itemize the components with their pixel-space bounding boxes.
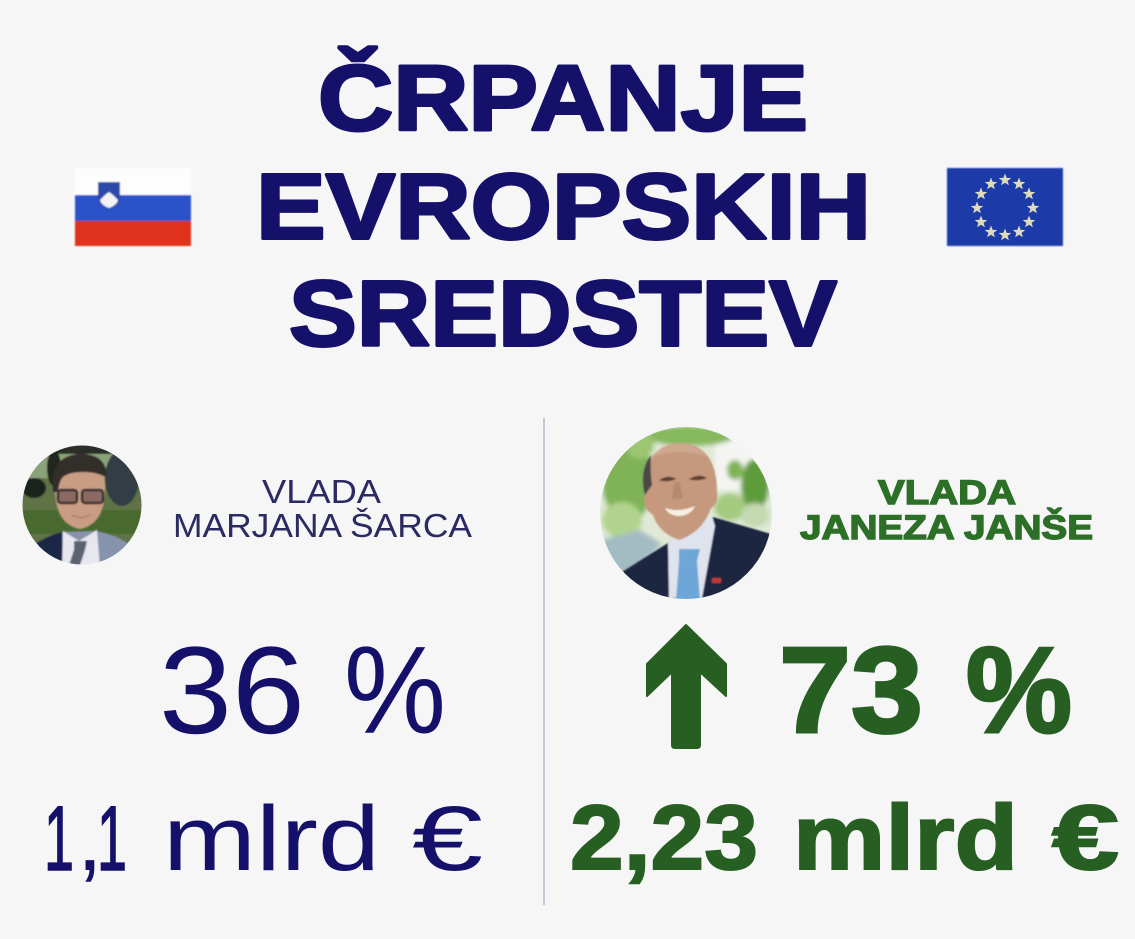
stat: 1,1 mlrd €: mlrd [163,788,380,890]
stat: 2,23 mlrd € [570,787,1119,889]
stat: 2,23 mlrd €: € [1052,787,1119,889]
stat: 1,1 mlrd €: 1 [97,788,127,890]
icon: EU flag [947,168,1063,246]
divider [543,418,545,905]
title: ČRPANJE [318,46,808,150]
stat: 1,1 mlrd € [44,788,483,890]
icon: up arrow [647,625,726,748]
stat: 2,23 mlrd €: mlrd [793,787,1018,889]
portrait: Marjan Šarec [20,443,144,569]
stat: 36 %: 36 [159,622,305,760]
stat: 1,1 mlrd €: € [412,788,483,890]
title: SREDSTEV [289,262,837,366]
panel: Šarec government [20,443,483,890]
heading: Vlada Janeza Janše [800,474,1093,547]
stat: 1,1 mlrd €: 1 [44,788,74,890]
heading: Vlada Marjana Šarca [173,473,472,544]
heading: Vlada Janeza Janše: VLADA [878,474,1016,512]
stat: 36 % [159,622,446,760]
panel: Janša government [570,425,1119,889]
stat: 73 % [779,622,1072,758]
title [256,46,871,366]
stat: 1,1 mlrd €: , [77,788,103,890]
icon: Slovenian flag [75,168,191,246]
portrait: Janez Janša [598,425,774,604]
heading: Vlada Marjana Šarca: MARJANA ŠARCA [173,507,472,544]
stat: 73 %: 73 [779,622,923,758]
heading: Vlada Janeza Janše: JANEZA JANŠE [800,508,1093,547]
stat: 73 %: % [966,622,1072,758]
title: EVROPSKIH [256,154,871,258]
heading: Vlada Marjana Šarca: VLADA [262,473,381,510]
stat: 36 %: % [344,622,446,760]
stat: 2,23 mlrd €: 2,23 [570,787,758,889]
